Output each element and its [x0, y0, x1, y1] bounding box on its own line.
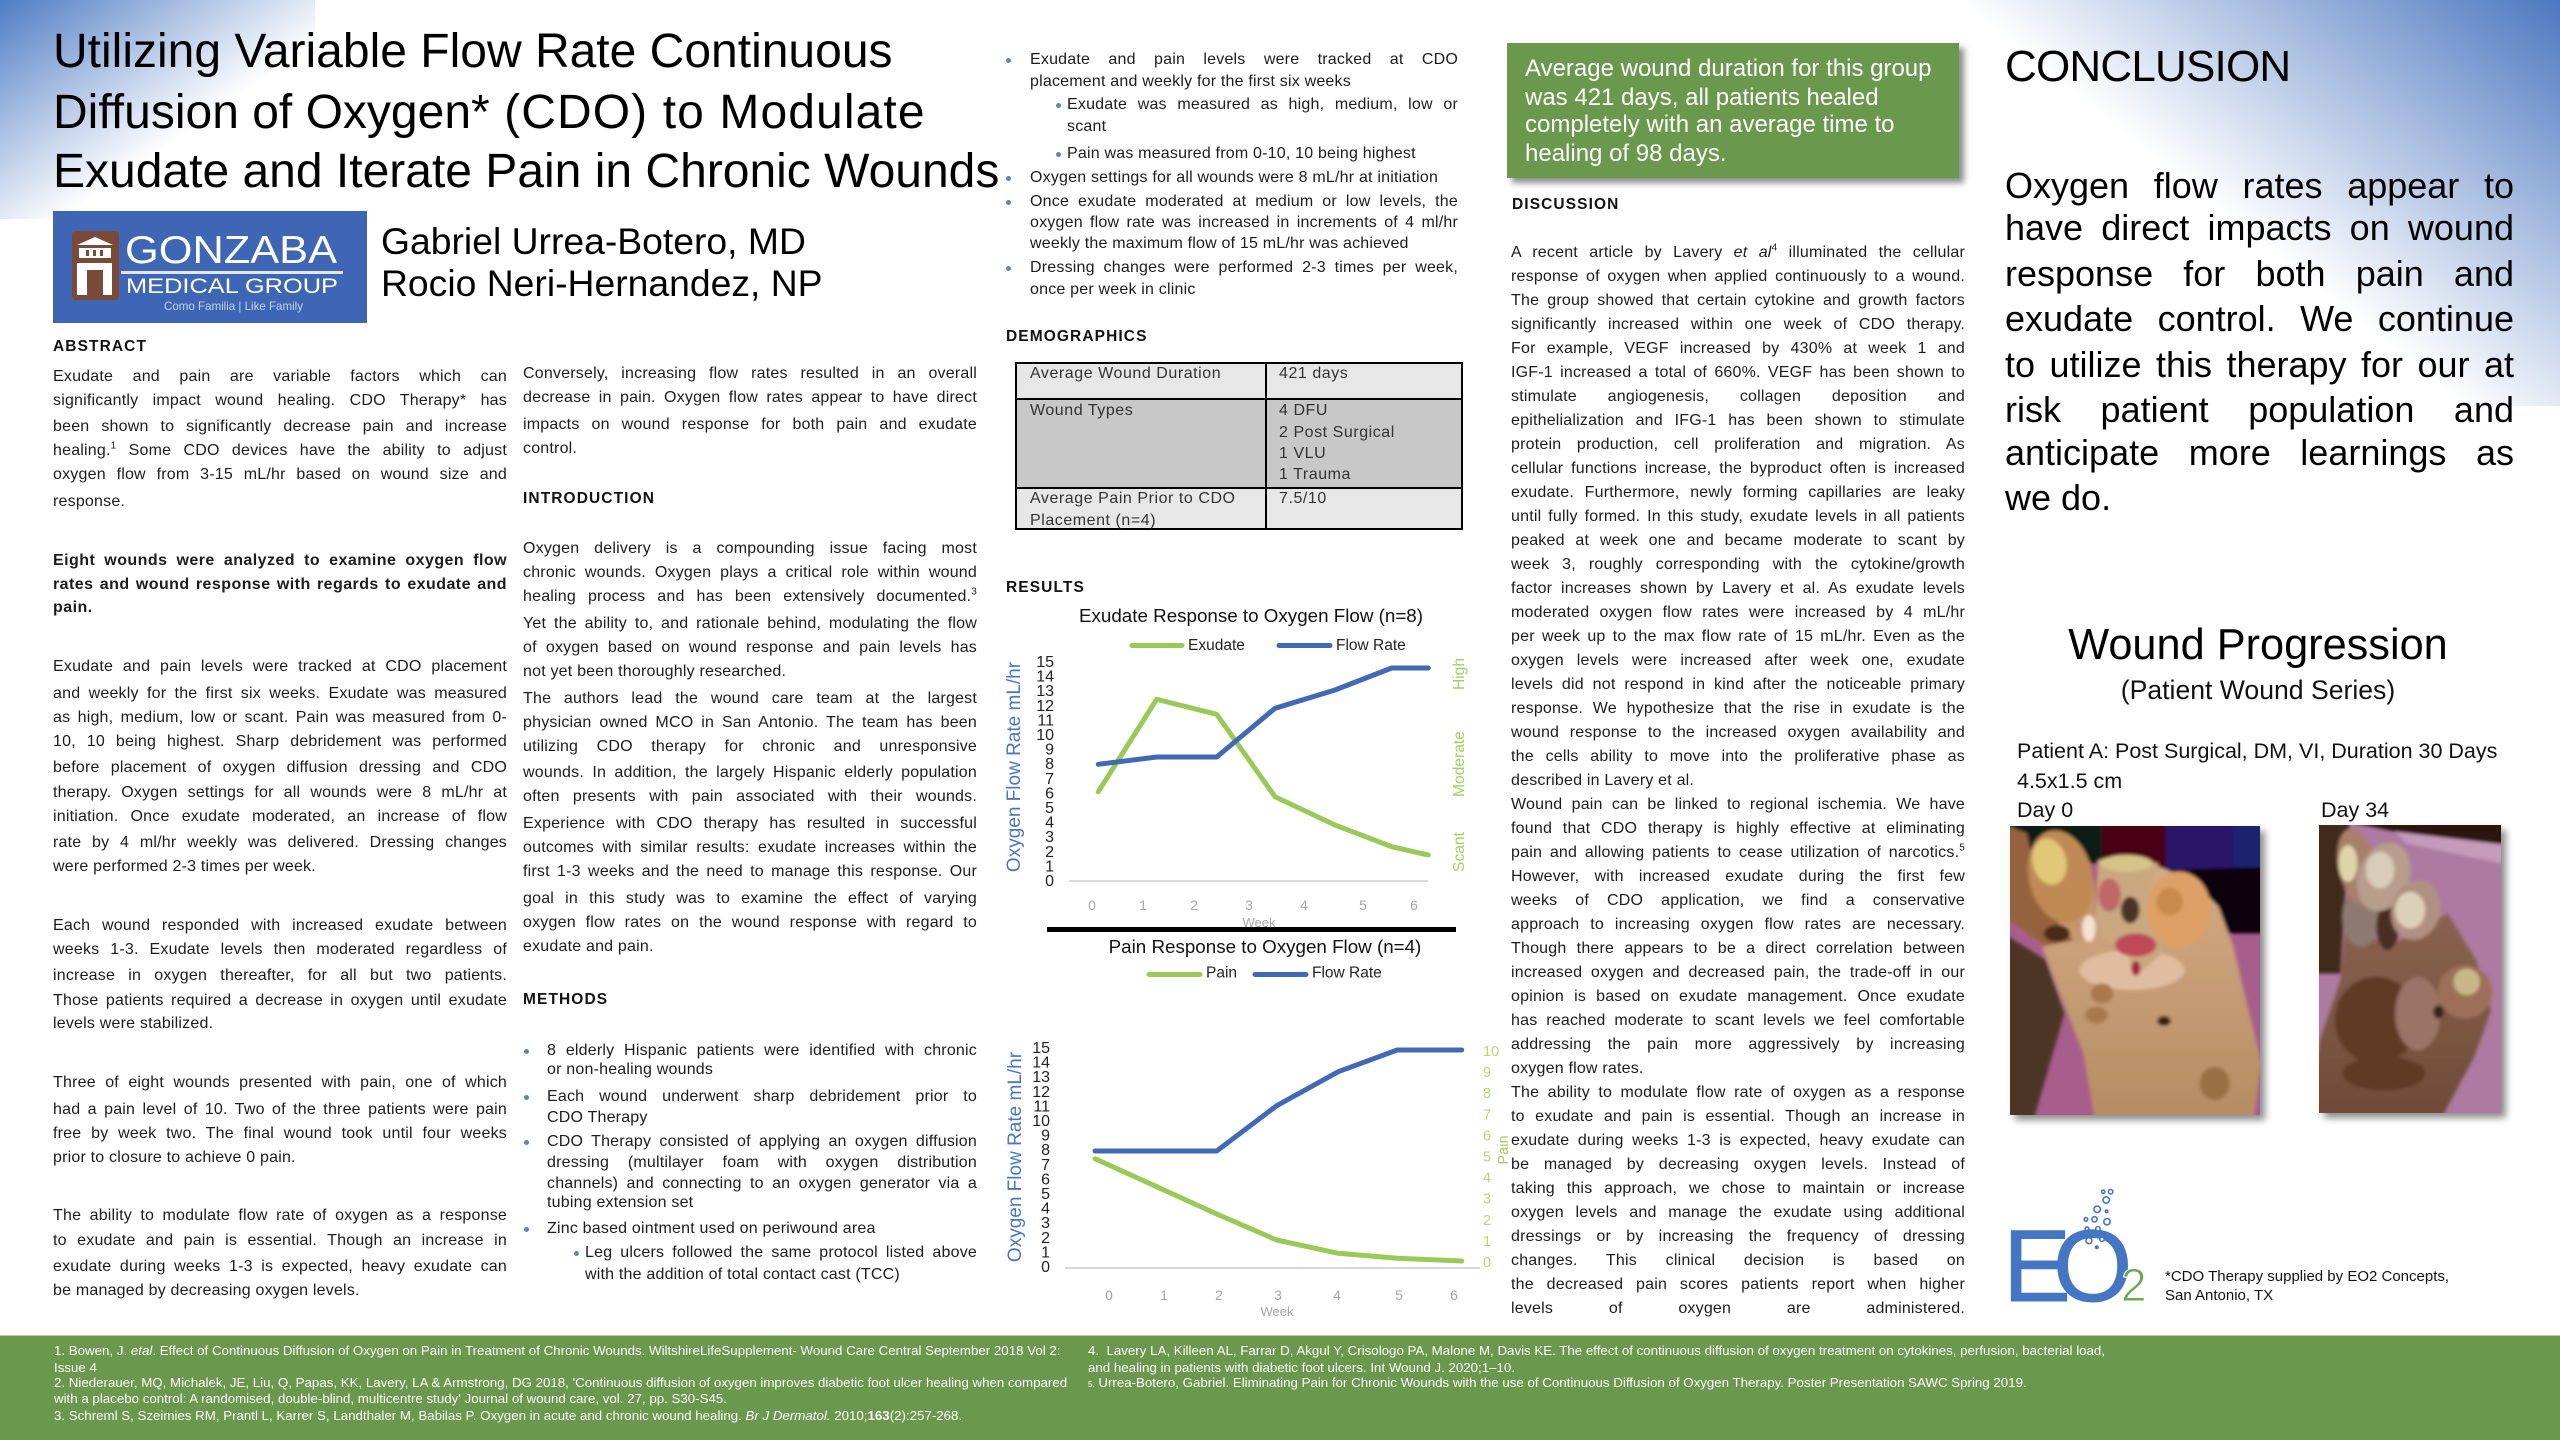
chart: pain response to oxygen flow: 10 [1032, 1113, 1050, 1130]
chart: exudate response to oxygen flow: 12 [1036, 698, 1054, 715]
background gradient: top right corner [1968, 0, 2560, 406]
bulleted list: methods part two: placement and weekly for the first six weeks [1030, 73, 1351, 90]
chart: exudate response to oxygen flow: 1 [1045, 858, 1054, 875]
chart: pain response to oxygen flow: 3 [1041, 1215, 1050, 1232]
chart: pain response to oxygen flow: 2 [1041, 1230, 1050, 1247]
authors [381, 220, 823, 304]
heading: abstract: ABSTRACT [53, 338, 147, 355]
text block: tracking paragraph: initiation. Once exudate moderated, an increase of flow [53, 808, 507, 825]
text block: introduction body: The authors lead the wound care team at the largest [523, 690, 977, 707]
text block: abstract continuation: control. [523, 440, 577, 457]
title: Diffusion of Oxygen* (CDO) to Modulate [53, 86, 926, 139]
text block: modulation paragraph [53, 1207, 507, 1299]
chart: exudate response to oxygen flow: High [1451, 658, 1468, 690]
text block: pain paragraph: prior to closure to achieve 0 pain. [53, 1149, 296, 1166]
text block: modulation paragraph: exudate during weeks 1-3 is expected, heavy exudate can [53, 1258, 507, 1275]
chart: pain response to oxygen flow: 3 [1483, 1192, 1491, 1208]
chart: exudate response to oxygen flow: 0 [1045, 873, 1054, 890]
bulleted list: methods part one: 8 elderly Hispanic patients were identified with chronic [547, 1042, 977, 1059]
text block: abstract continuation: impacts on wound response for both pain and exudate [523, 416, 977, 433]
panel: methods [523, 991, 977, 1283]
text block: introduction body: wounds. In addition, the largely Hispanic elderly population [523, 764, 977, 781]
chart: pain response to oxygen flow: 0 [1041, 1259, 1050, 1276]
chart: exudate response to oxygen flow: Scant [1451, 831, 1468, 872]
bulleted list: methods part one: Each wound underwent sharp debridement prior to [547, 1088, 977, 1105]
bulleted list: methods part two: once per week in clinic [1030, 281, 1196, 298]
text block: introduction body: healing process and has been extensively documented.3 [523, 587, 977, 605]
bulleted list: methods part one: with the addition of total contact cast (TCC) [585, 1266, 900, 1283]
text block: discussion body: approach to increasing oxygen flow rates are necessary. [1511, 916, 1965, 933]
text block: pain paragraph: had a pain level of 10. Two of the three patients were pain [53, 1101, 507, 1118]
text block: discussion body: The ability to modulate flow rate of oxygen as a response [1511, 1084, 1965, 1101]
text block: abstract intro: significantly impact wound healing. CDO Therapy* has [53, 392, 507, 409]
chart: pain response to oxygen flow: 7 [1041, 1157, 1050, 1174]
text block: abstract intro: healing.1 Some CDO devices have the ability to adjust [53, 441, 507, 459]
text block: introduction body: Experience with CDO therapy has resulted in successful [523, 815, 977, 832]
text block: discussion body [1511, 243, 1965, 1317]
callout: wound duration summary: Average wound duration for this group [1525, 55, 1932, 82]
text block: exudate response paragraph: weeks 1-3. Exudate levels then moderated regardless of [53, 941, 507, 958]
chart: exudate response to oxygen flow: Flow Rate [1336, 637, 1406, 654]
chart: pain response to oxygen flow: 2 [1483, 1213, 1491, 1229]
chart: pain response to oxygen flow: 0 [1483, 1255, 1491, 1271]
chart: pain response to oxygen flow: Oxygen Flow Rate mL/hr [1005, 1051, 1026, 1262]
chart: pain response to oxygen flow: 9 [1483, 1065, 1491, 1081]
text block: introduction body [523, 540, 977, 955]
text block: tracking paragraph: as high, medium, low or scant. Pain was measured from 0- [53, 709, 507, 726]
text block: introduction body: Yet the ability to, and rationale behind, modulating the flow [523, 615, 977, 632]
text block: conclusion body: have direct impacts on wound [2005, 207, 2514, 248]
chart: exudate response to oxygen flow: 3 [1045, 829, 1054, 846]
chart: pain response to oxygen flow: 12 [1032, 1084, 1050, 1101]
chart: exudate response to oxygen flow: 6 [1045, 785, 1054, 802]
chart: pain response to oxygen flow: 11 [1033, 1098, 1050, 1115]
text block: discussion body: pain and allowing patients to cease utilization of narcotics.5 [1511, 843, 1965, 861]
chart: exudate response to oxygen flow: 6 [1410, 897, 1418, 913]
title: Exudate and Iterate Pain in Chronic Wounds [53, 145, 999, 198]
callout: wound duration summary: completely with an average time to [1525, 111, 1895, 138]
chart: pain response to oxygen flow: Flow Rate [1312, 964, 1382, 982]
references: column two: and healing in patients with diabetic foot ulcers. Int Wound J. 2020;1–10. [1088, 1360, 1515, 1375]
callout: wound duration summary: healing of 98 days. [1525, 140, 1726, 167]
background gradient: top left corner [0, 0, 315, 219]
chart: pain response to oxygen flow: 4 [1483, 1171, 1491, 1187]
divider between charts [1047, 927, 1456, 932]
bulleted list: methods part two: Exudate and pain levels were tracked at CDO [1030, 51, 1458, 68]
bulleted list: methods part one: CDO Therapy [547, 1109, 648, 1126]
table: demographics: 421 days [1279, 365, 1348, 382]
logo: Gonzaba Medical Group: Como Familia | Like Family [164, 299, 303, 313]
callout: wound duration summary [1507, 43, 1959, 178]
text block: abstract intro: Exudate and pain are variable factors which can [53, 368, 507, 385]
text block: exudate response paragraph: Those patients required a decrease in oxygen until exudate [53, 992, 507, 1009]
text block: patient description [2017, 739, 2497, 793]
text block: discussion body: oxygen levels were increased after week one, exudate [1511, 652, 1965, 669]
chart: exudate response to oxygen flow: 8 [1045, 756, 1054, 773]
text block: conclusion body [2005, 165, 2514, 518]
text block: conclusion body: we do. [2005, 477, 2111, 518]
text block: conclusion body: Oxygen flow rates appear to [2005, 165, 2514, 206]
text block: discussion body: peaked at week one and became moderate to scant by [1511, 532, 1965, 549]
text block: discussion body: levels of oxygen are administered. [1511, 1300, 1965, 1317]
text block: introduction body: first 1-3 weeks and the need to manage this response. Our [523, 863, 977, 880]
chart: pain response to oxygen flow: 9 [1041, 1128, 1050, 1145]
chart: pain response to oxygen flow: 5 [1041, 1186, 1050, 1203]
references: column two: 5. Urrea-Botero, Gabriel. Eliminating Pain for Chronic Wounds with the use of Continuous Diffusion of Oxygen Therapy. Poster Presentation SAWC Spring 2019. [1088, 1375, 2027, 1390]
chart: pain response to oxygen flow: Week [1260, 1304, 1294, 1319]
text block: discussion body: exudate. Furthermore, newly forming capillaries are leaky [1511, 484, 1965, 501]
heading: results: RESULTS [1006, 579, 1085, 596]
text block: introduction body: utilizing CDO therapy for chronic and unresponsive [523, 738, 977, 755]
text block: discussion body: increased oxygen and decreased pain, the trade-off in our [1511, 964, 1965, 981]
chart: exudate response to oxygen flow: 2 [1190, 897, 1198, 913]
photo: foot healed at day 34 [2319, 825, 2501, 1113]
chart: pain response to oxygen flow: 2 [1215, 1287, 1223, 1303]
text block: discussion body: oxygen levels and manage the exudate using additional [1511, 1204, 1965, 1221]
text block: discussion body: stimulate angiogenesis, collagen deposition and [1511, 388, 1965, 405]
heading: discussion: DISCUSSION [1512, 196, 1619, 213]
text block: discussion body: exudate during weeks 1-3 is expected, heavy exudate can [1511, 1132, 1965, 1149]
references: column one: with a placebo control: A randomised, double-blind, multicentre study' Journal of wound care, vol. 27, pp. S30-S45. [54, 1391, 727, 1406]
title: Utilizing Variable Flow Rate Continuous [53, 25, 893, 78]
logo: Gonzaba Medical Group [53, 211, 367, 323]
chart: exudate response to oxygen flow: 15 [1036, 654, 1054, 671]
heading: demographics: DEMOGRAPHICS [1006, 328, 1148, 345]
text block: discussion body: cellular functions increase, the byproduct often is increased [1511, 460, 1965, 477]
chart: pain response to oxygen flow: 13 [1032, 1069, 1050, 1086]
references: column one: 1. Bowen, J. etal. Effect of Continuous Diffusion of Oxygen on Pain in Treatment of Chronic Wounds. WiltshireLifeSupplement- Wound Care Central September 2018 Vol 2: [54, 1343, 1060, 1358]
text block: introduction body: not yet been thoroughly researched. [523, 663, 786, 680]
footnote: CDO therapy supplier [2165, 1268, 2449, 1304]
bulleted list: methods part two: Dressing changes were performed 2-3 times per week, [1030, 259, 1458, 276]
table: demographics [1015, 362, 1463, 530]
subheading: patient wound series: (Patient Wound Series) [2121, 675, 2395, 705]
text block: modulation paragraph: The ability to modulate flow rate of oxygen as a response [53, 1207, 507, 1224]
text block: exudate response paragraph: Each wound responded with increased exudate between [53, 917, 507, 934]
logo: EO2 [2005, 1188, 2147, 1305]
chart: pain response to oxygen flow: 8 [1483, 1086, 1491, 1102]
text block: tracking paragraph: were performed 2-3 times per week. [53, 858, 316, 875]
text block: abstract continuation: Conversely, increasing flow rates resulted in an overall [523, 365, 977, 382]
text block: pain paragraph: free by week two. The final wound took until four weeks [53, 1125, 507, 1142]
chart: pain response to oxygen flow: 6 [1041, 1171, 1050, 1188]
text block: tracking paragraph: Exudate and pain levels were tracked at CDO placement [53, 658, 507, 675]
text block: discussion body: has reached moderate to scant levels we feel comfortable [1511, 1012, 1965, 1029]
text block: discussion body: wound response to the increased oxygen availability and [1511, 724, 1965, 741]
text block: discussion body: opinion is based on exudate management. Once exudate [1511, 988, 1965, 1005]
bulleted list: methods part one: Leg ulcers followed the same protocol listed above [585, 1244, 977, 1261]
chart: pain response to oxygen flow: 4 [1041, 1201, 1050, 1218]
photo: foot wound at day 0 [2010, 826, 2260, 1115]
text block: discussion body: described in Lavery et al. [1511, 772, 1694, 789]
text block: abstract intro: response. [53, 493, 125, 510]
panel: introduction [523, 490, 977, 955]
logo: Gonzaba Medical Group: GONZABA [125, 229, 337, 272]
references: column one: 2. Niederauer, MQ, Michalek, JE, Liu, Q, Papas, KK, Lavery, LA & Armstrong, DG 2018, 'Continuous diffusion of oxygen improves diabetic foot ulcer healing when compared [54, 1375, 1067, 1390]
text block: discussion body: weeks of CDO application, we find a conservative [1511, 892, 1965, 909]
chart: exudate response to oxygen flow: 4 [1300, 897, 1308, 913]
chart: pain response to oxygen flow: 1 [1483, 1234, 1491, 1250]
text block: discussion body: epithelialization and IFG-1 has been shown to stimulate [1511, 412, 1965, 429]
panel: wound progression [2010, 621, 2511, 1125]
heading: methods: METHODS [523, 991, 608, 1008]
text block: introduction body: outcomes with similar results: exudate increases within the [523, 839, 977, 856]
chart: pain response to oxygen flow: 5 [1395, 1287, 1403, 1303]
text block: abstract continuation [523, 365, 977, 457]
text block: discussion body: taking this approach, we chose to maintain or increase [1511, 1180, 1965, 1197]
table: demographics: Average Wound Duration [1030, 365, 1221, 382]
text block: patient description: Patient A: Post Surgical, DM, VI, Duration 30 Days [2017, 739, 2497, 763]
chart: pain response to oxygen flow: 0 [1105, 1287, 1113, 1303]
heading: introduction: INTRODUCTION [523, 490, 655, 507]
text block: introduction body: physician owned MCO in San Antonio. The team has been [523, 714, 977, 731]
bulleted list: methods part two: Once exudate moderated at medium or low levels, the [1030, 193, 1458, 210]
text block: tracking paragraph: before placement of oxygen diffusion dressing and CDO [53, 759, 507, 776]
references: column two [1088, 1343, 2105, 1390]
text block: discussion body: dressings or by increasing the frequency of dressing [1511, 1228, 1965, 1245]
chart: pain response to oxygen flow: 7 [1483, 1107, 1491, 1123]
text block: discussion body: oxygen flow rates. [1511, 1060, 1644, 1077]
chart: exudate response to oxygen flow: 14 [1036, 669, 1054, 686]
text block: conclusion body: risk patient population and [2005, 389, 2514, 430]
chart: pain response to oxygen flow: 6 [1483, 1128, 1491, 1144]
chart: pain response to oxygen flow: 1 [1041, 1244, 1050, 1261]
chart: exudate response to oxygen flow: Exudate Response to Oxygen Flow (n=8) [1079, 605, 1423, 626]
panel: abstract [53, 338, 507, 1299]
chart: pain response to oxygen flow: 10 [1483, 1044, 1499, 1060]
text block: discussion body: levels did not respond in kind after the noticeable primary [1511, 676, 1965, 693]
chart: pain response to oxygen flow: 1 [1160, 1287, 1168, 1303]
table: demographics: 1 VLU [1279, 445, 1326, 462]
text block: conclusion body: response for both pain and [2005, 253, 2514, 294]
text block: tracking paragraph: rate by 4 ml/hr weekly was delivered. Dressing changes [53, 834, 507, 851]
bulleted list: methods part one: dressing (multilayer foam with oxygen distribution [547, 1154, 977, 1171]
text block: abstract continuation: decrease in pain. Oxygen flow rates appear to have direct [523, 389, 977, 406]
chart: exudate response to oxygen flow: 0 [1088, 897, 1096, 913]
bulleted list: methods part one: channels) and connecting to an oxygen generator via a [547, 1175, 977, 1192]
text block: introduction body: often presents with pain associated with their wounds. [523, 788, 977, 805]
text block: exudate response paragraph: levels were stabilized. [53, 1015, 213, 1032]
text block: discussion body: until fully formed. In this study, exudate levels in all patients [1511, 508, 1965, 525]
text block: abstract intro [53, 368, 507, 510]
bulleted list: methods part two: Pain was measured from 0-10, 10 being highest [1067, 145, 1416, 162]
text block: patient description: 4.5x1.5 cm [2017, 769, 2122, 793]
bulleted list: methods part one: Zinc based ointment used on periwound area [547, 1220, 876, 1237]
chart: exudate response to oxygen flow: 4 [1045, 815, 1054, 832]
footnote: CDO therapy supplier: *CDO Therapy supplied by EO2 Concepts, [2165, 1268, 2449, 1285]
bulleted list: methods part one: tubing extension set [547, 1194, 693, 1211]
chart: pain response to oxygen flow: 4 [1333, 1287, 1341, 1303]
text block: discussion body: the cells ability to move into the proliferative phase as [1511, 748, 1965, 765]
table: demographics: 7.5/10 [1279, 490, 1327, 507]
text block: discussion body: the decreased pain scores patients report when higher [1511, 1276, 1965, 1293]
references: column one: Issue 4 [54, 1360, 97, 1375]
text block: discussion body: be managed by decreasing oxygen levels. Instead of [1511, 1156, 1965, 1173]
text block: discussion body: week 3, roughly corresponding with the cytokine/growth [1511, 556, 1965, 573]
text block: abstract intro: been shown to significantly decrease pain and increase [53, 418, 507, 435]
table: demographics: Placement (n=4) [1030, 512, 1156, 529]
text block: discussion body: addressing the pain more aggressively by increasing [1511, 1036, 1965, 1053]
text block: exudate response paragraph [53, 917, 507, 1032]
chart: exudate response to oxygen flow: 5 [1045, 800, 1054, 817]
chart: pain response to oxygen flow: 3 [1274, 1287, 1282, 1303]
text block: modulation paragraph: be managed by decreasing oxygen levels. [53, 1282, 360, 1299]
bulleted list: methods part one: CDO Therapy consisted of applying an oxygen diffusion [547, 1133, 977, 1150]
chart: exudate response to oxygen flow: 13 [1036, 683, 1054, 700]
text block: discussion body: protein production, cell proliferation and migration. As [1511, 436, 1965, 453]
text block: modulation paragraph: to exudate and pain is essential. Though an increase in [53, 1232, 507, 1249]
table: demographics: Wound Types [1030, 402, 1133, 419]
text block: discussion body: response. We hypothesize that the rise in exudate is the [1511, 700, 1965, 717]
text block: conclusion body: to utilize this therapy for our at [2005, 344, 2514, 385]
bulleted list: methods part one: or non-healing wounds [547, 1061, 713, 1078]
logo: Gonzaba Medical Group: MEDICAL GROUP [126, 275, 338, 298]
text block: conclusion body: anticipate more learnings as [2005, 432, 2514, 473]
text block: pain paragraph [53, 1074, 507, 1166]
heading: wound progression: Wound Progression [2068, 621, 2448, 669]
bulleted list: methods part two: oxygen flow rate was increased in increments of 4 ml/hr [1030, 214, 1458, 231]
text block: discussion body: For example, VEGF increased by 430% at week 1 and [1511, 340, 1965, 357]
text block: discussion body: Though there appears to be a direct correlation between [1511, 940, 1965, 957]
chart: pain response to oxygen flow: 8 [1041, 1142, 1050, 1159]
chart: exudate response to oxygen flow: 9 [1045, 742, 1054, 759]
panel: conclusion [2005, 42, 2514, 518]
chart: exudate response to oxygen flow: 7 [1045, 771, 1054, 788]
authors: Rocio Neri-Hernandez, NP [381, 262, 823, 304]
text block: discussion body: significantly increased within one week of CDO therapy. [1511, 316, 1965, 333]
text block: discussion body: changes. This clinical decision is based on [1511, 1252, 1965, 1269]
chart: exudate response to oxygen flow: 11 [1037, 712, 1054, 729]
bulleted list: methods part two: Exudate was measured as high, medium, low or [1067, 96, 1458, 113]
text block: discussion body: The group showed that certain cytokine and growth factors [1511, 292, 1965, 309]
text block: introduction body: exudate and pain. [523, 938, 654, 955]
text block: key statement in bold: pain. [53, 599, 93, 616]
table: demographics: Average Pain Prior to CDO [1030, 490, 1236, 507]
text block: discussion body: However, with increased exudate during the first few [1511, 868, 1965, 885]
bulleted list: methods part one [524, 1042, 977, 1283]
text block: tracking paragraph: 10, 10 being highest. Sharp debridement was performed [53, 733, 507, 750]
chart: exudate response to oxygen flow: 5 [1359, 897, 1367, 913]
text block: discussion body: to exudate and pain is essential. Though an increase in [1511, 1108, 1965, 1125]
chart: pain response to oxygen flow: 5 [1483, 1150, 1491, 1166]
text block: discussion body: moderated oxygen flow rates were increased by 4 mL/hr [1511, 604, 1965, 621]
text block: key statement in bold: rates and wound response with regards to exudate and [53, 576, 507, 593]
text block: introduction body: chronic wounds. Oxygen plays a critical role within wound [523, 564, 977, 581]
text block: discussion body: A recent article by Lavery et al4 illuminated the cellular [1511, 243, 1965, 261]
chart: pain response to oxygen flow: 15 [1032, 1040, 1050, 1057]
table: demographics: 1 Trauma [1279, 466, 1351, 483]
footnote: CDO therapy supplier: San Antonio, TX [2165, 1287, 2273, 1304]
text block: abstract intro: oxygen flow from 3-15 mL/hr based on wound size and [53, 466, 507, 483]
text block: introduction body: goal in this study was to examine the effect of varying [523, 890, 977, 907]
chart: exudate response to oxygen flow [1004, 605, 1468, 928]
text block: exudate response paragraph: increase in oxygen thereafter, for all but two patients. [53, 967, 507, 984]
text block: introduction body: Oxygen delivery is a compounding issue facing most [523, 540, 977, 557]
chart: pain response to oxygen flow: 6 [1450, 1287, 1458, 1303]
chart: exudate response to oxygen flow: 3 [1245, 897, 1253, 913]
bulleted list: methods part two [1006, 51, 1458, 298]
text block: pain paragraph: Three of eight wounds presented with pain, one of which [53, 1074, 507, 1091]
chart: pain response to oxygen flow: 14 [1032, 1055, 1050, 1072]
title [53, 25, 999, 198]
table: demographics: 2 Post Surgical [1279, 424, 1395, 441]
text block: discussion body: IGF-1 increased a total of 660%. VEGF has been shown to [1511, 364, 1965, 381]
chart: pain response to oxygen flow [1005, 936, 1510, 1319]
callout: wound duration summary: was 421 days, all patients healed [1525, 84, 1879, 111]
references: column one [54, 1343, 1067, 1423]
chart: pain response to oxygen flow: Pain [1206, 964, 1237, 982]
chart: exudate response to oxygen flow: Exudate [1188, 637, 1245, 654]
references: column one: 3. Schreml S, Szeimies RM, Prantl L, Karrer S, Landthaler M, Babilas P. Oxygen in acute and chronic wound healing. Br J Dermatol. 2010;163(2):257-268. [54, 1408, 962, 1423]
text block: discussion body: response of oxygen when applied continuously to a wound. [1511, 268, 1965, 285]
text block: tracking paragraph [53, 658, 507, 875]
authors: Gabriel Urrea-Botero, MD [381, 220, 806, 262]
label: day 34: Day 34 [2321, 798, 2389, 822]
text block: tracking paragraph: and weekly for the first six weeks. Exudate was measured [53, 685, 507, 702]
text block: discussion body: Wound pain can be linked to regional ischemia. We have [1511, 796, 1965, 813]
chart: exudate response to oxygen flow: 10 [1036, 727, 1054, 744]
bulleted list: methods part two: Oxygen settings for all wounds were 8 mL/hr at initiation [1030, 169, 1438, 186]
footer: references [0, 1335, 2560, 1440]
text block: conclusion body: exudate control. We continue [2005, 298, 2514, 339]
references: column two: 4. Lavery LA, Killeen AL, Farrar D, Akgul Y, Crisologo PA, Malone M, Davis KE. The effect of continuous diffusion of oxygen treatment on cytokines, perfusion, bacterial load, [1088, 1343, 2105, 1358]
text block: discussion body: factor increases shown by Lavery et al. As exudate levels [1511, 580, 1965, 597]
chart: pain response to oxygen flow: Pain Response to Oxygen Flow (n=4) [1109, 936, 1421, 957]
chart: exudate response to oxygen flow: 1 [1139, 897, 1147, 913]
label: day 0: Day 0 [2017, 798, 2073, 822]
chart: exudate response to oxygen flow: 2 [1045, 844, 1054, 861]
chart: exudate response to oxygen flow: Moderate [1451, 731, 1468, 797]
table: demographics: 4 DFU [1279, 402, 1328, 419]
bulleted list: methods part two: scant [1067, 118, 1106, 135]
text block: key statement in bold [53, 552, 507, 616]
text block: tracking paragraph: therapy. Oxygen settings for all wounds were 8 mL/hr at [53, 784, 507, 801]
heading: conclusion: CONCLUSION [2005, 42, 2290, 91]
text block: key statement in bold: Eight wounds were analyzed to examine oxygen flow [53, 552, 507, 569]
chart: exudate response to oxygen flow: Oxygen Flow Rate mL/hr [1004, 661, 1025, 872]
text block: introduction body: oxygen flow rates on the wound response with regard to [523, 914, 977, 931]
text block: discussion body: per week up to the max flow rate of 15 mL/hr. Even as the [1511, 628, 1965, 645]
text block: introduction body: of oxygen based on wound response and pain levels has [523, 639, 977, 656]
text block: discussion body: found that CDO therapy is highly effective at eliminating [1511, 820, 1965, 837]
bulleted list: methods part two: weekly the maximum flow of 15 mL/hr was achieved [1030, 235, 1409, 252]
